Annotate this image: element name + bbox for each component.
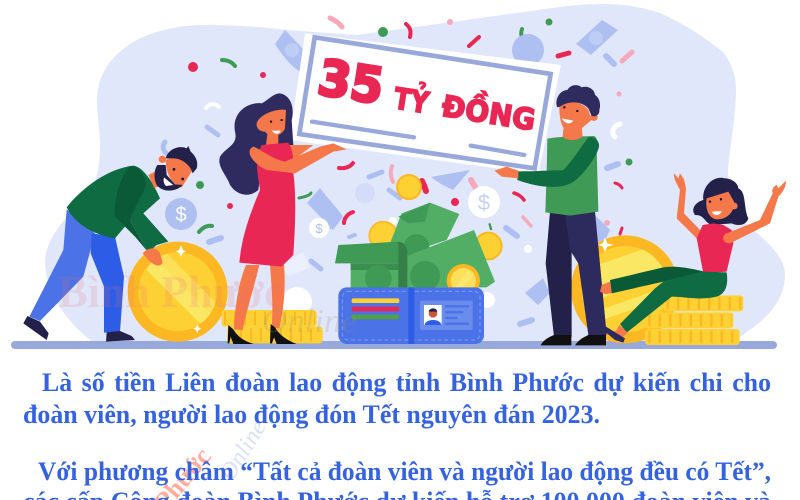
body paragraph 2: Với phương châm “Tất cả đoàn viên và người lao động đều có Tết”, (38, 457, 771, 486)
watermark bottom: Online (215, 416, 272, 485)
body paragraph 1 (23, 368, 771, 429)
man pushing coin (23, 146, 197, 342)
right coin (571, 235, 679, 343)
background blob (45, 4, 785, 343)
coin stacks right (645, 295, 743, 345)
floating dollar coins and bills: $ (315, 221, 323, 236)
cheque amount: 35 (314, 48, 388, 116)
coin stacks left (222, 310, 323, 343)
cheque amount (314, 48, 539, 137)
man holding cheque (494, 136, 607, 345)
wallet (338, 287, 484, 344)
cheque card (289, 33, 561, 174)
money box with green bills (335, 203, 502, 297)
floating dollar coins and bills: $ (175, 204, 187, 226)
watermark top (58, 266, 357, 340)
big coin (128, 242, 228, 342)
floating dollar coins and bills: $ (478, 190, 490, 215)
watermark bottom (148, 416, 272, 500)
watermark top: Online (262, 303, 357, 340)
confetti (163, 18, 633, 324)
body paragraph 1: đoàn viên, người lao động đón Tết nguyên đán 2023. (23, 400, 600, 429)
watermark top: Bình Phước (58, 266, 284, 317)
cheque amount: TỶ (392, 77, 432, 120)
man head (556, 85, 600, 140)
cheque amount: ĐỒNG (440, 83, 539, 137)
woman sitting on coins (600, 173, 786, 343)
ground line (11, 341, 777, 349)
woman in red dress (219, 93, 347, 344)
body paragraph 2 (23, 457, 771, 500)
floating dollar coins and bills (165, 20, 618, 317)
body paragraph 1: Là số tiền Liên đoàn lao động tỉnh Bình Phước dự kiến chi cho (42, 368, 771, 397)
